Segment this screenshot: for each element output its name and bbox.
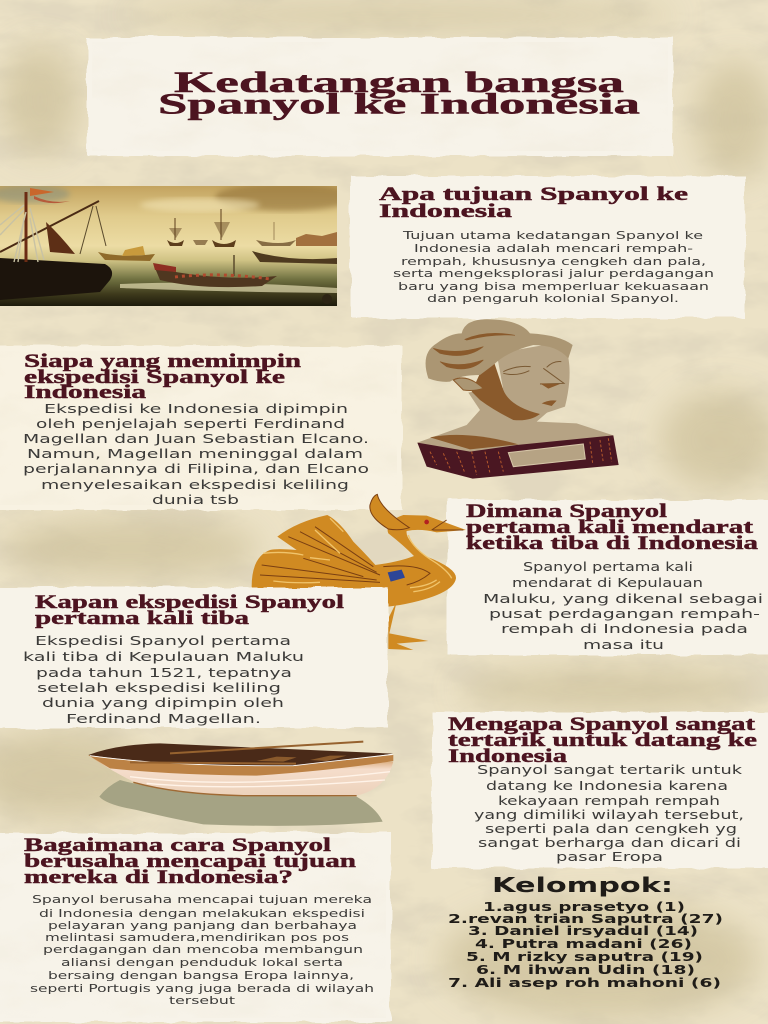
panel background (350, 176, 745, 318)
body text (23, 633, 304, 726)
boat shadow (99, 780, 383, 826)
heading: ekspedisi Spanyol ke (24, 367, 285, 388)
icon: classical bust (417, 319, 619, 479)
member list: 7. Ali asep roh mahoni (6) (448, 975, 721, 990)
group members (448, 873, 723, 990)
body text: Namun, Magellan meninggal dalam (27, 446, 363, 461)
member list: 2.revan trian Saputra (27) (448, 911, 723, 926)
title card (87, 37, 673, 156)
body text: melintasi samudera,mendirikan pos pos (45, 932, 349, 944)
heading: Bagaimana cara Spanyol (24, 835, 331, 856)
group heading: Kelompok: (492, 873, 673, 897)
body text: menyelesaikan ekspedisi keliling (41, 477, 349, 492)
body text: Ferdinand Magellan. (66, 711, 261, 726)
body text (30, 894, 374, 1007)
boat hull (88, 755, 393, 796)
body text: tersebut (169, 995, 235, 1007)
body text: Ekspedisi Spanyol pertama (35, 633, 291, 648)
panel: siapa yang memimpin (0, 346, 402, 510)
body text: dan pengaruh kolonial Spanyol. (427, 292, 679, 305)
body text: Maluku, yang dikenal sebagai (483, 591, 763, 606)
body text: dunia tsb (152, 492, 239, 507)
body text: masa itu (583, 637, 664, 652)
body text: datang ke Indonesia karena (486, 779, 728, 793)
heading: mereka di Indonesia? (24, 867, 293, 888)
heading: Indonesia (379, 201, 513, 222)
panel: mengapa (432, 712, 768, 868)
panel background (0, 833, 391, 1022)
body text: setelah ekspedisi keliling (37, 680, 281, 695)
bird legs and feet (388, 602, 428, 650)
body text: rempah, khususnya cengkeh dan pala, (401, 255, 706, 268)
heading: Indonesia (24, 382, 147, 403)
heading: Dimana Spanyol (466, 501, 667, 522)
panel: tujuan (350, 176, 745, 318)
body text: yang dimiliki wilayah tersebut, (474, 808, 744, 822)
body text: seperti Portugis yang juga berada di wilayah (30, 983, 374, 995)
body text: pasar Eropa (556, 850, 663, 864)
heading (35, 592, 344, 629)
panel: title (87, 37, 673, 156)
body text: Spanyol berusaha mencapai tujuan mereka (32, 894, 372, 906)
body text: kali tiba di Kepulauan Maluku (23, 649, 304, 664)
body text (393, 229, 714, 305)
heading (448, 714, 757, 767)
image: painting of Spanish ships (0, 183, 355, 306)
member list: 3. Daniel irsyadul (14) (468, 923, 698, 938)
heading: pertama kali tiba (35, 608, 250, 629)
body text (23, 401, 369, 507)
body text: aliansi dengan penduduk lokal serta (61, 957, 343, 969)
heading (379, 184, 688, 222)
member list: 1.agus prasetyo (1) (483, 899, 685, 914)
heading: berusaha mencapai tujuan (24, 851, 357, 872)
body text: perjalanannya di Filipina, dan Elcano (23, 461, 369, 476)
panel: dimana (447, 500, 768, 655)
member list: 6. M ihwan Udin (18) (476, 962, 695, 977)
heading (466, 501, 759, 554)
body text: di Indonesia dengan melakukan ekspedisi (39, 908, 365, 920)
face (497, 342, 570, 415)
panel background (0, 587, 388, 728)
body text: seperti pala dan cengkeh yg (485, 822, 737, 836)
panel background (432, 712, 768, 868)
plinth (417, 435, 619, 479)
body text (483, 559, 763, 652)
body text (474, 763, 744, 864)
panel background (447, 500, 768, 655)
heading (24, 835, 357, 888)
bird body and head (375, 515, 466, 607)
member list: 5. M rizky saputra (19) (466, 949, 703, 964)
title (158, 66, 640, 120)
member list: 4. Putra madani (26) (475, 936, 692, 951)
body text: pelayaran yang panjang dan berbahaya (48, 920, 357, 932)
boat interior (88, 743, 393, 766)
body text: baru yang bisa memperluar kekuasaan (398, 280, 709, 293)
body text: mendarat di Kepulauan (512, 575, 703, 590)
bird crest (370, 494, 409, 530)
heading: Apa tujuan Spanyol ke (379, 184, 688, 205)
heading: pertama kali mendarat (466, 517, 754, 538)
heading: Mengapa Spanyol sangat (448, 714, 756, 735)
heading: tertarik untuk datang ke (448, 730, 757, 751)
panel background (0, 346, 402, 510)
hair (426, 319, 573, 382)
body text: Ekspedisi ke Indonesia dipimpin (44, 401, 348, 416)
body text: Magellan dan Juan Sebastian Elcano. (23, 431, 369, 446)
panel: bagaimana (0, 833, 391, 1022)
body text: serta mengeksplorasi jalur perdagangan (393, 267, 714, 280)
body text: Spanyol sangat tertarik untuk (477, 763, 742, 777)
heading: Siapa yang memimpin (24, 351, 302, 372)
icon: golden bird (252, 494, 466, 650)
body text: bersaing dengan bangsa Eropa lainnya, (48, 970, 354, 982)
heading: Kapan ekspedisi Spanyol (35, 592, 344, 613)
body text: Indonesia adalah mencari rempah- (414, 242, 693, 255)
body text: rempah di Indonesia pada (501, 621, 748, 636)
member list (448, 899, 723, 990)
body text: oleh penjelajah seperti Ferdinand (36, 416, 345, 431)
heading: Indonesia (448, 746, 568, 767)
heading: ketika tiba di Indonesia (466, 533, 759, 554)
body text: perdagangan dan mencoba membangun (43, 944, 363, 956)
body text: pusat perdagangan rempah- (489, 606, 760, 621)
icon: wooden boat (88, 742, 393, 826)
body text: pada tahun 1521, tepatnya (36, 665, 292, 680)
title: Kedatangan bangsa (174, 66, 624, 99)
body text: Tujuan utama kedatangan Spanyol ke (402, 229, 703, 242)
body text: kekayaan rempah rempah (498, 794, 720, 808)
panel: kapan (0, 587, 388, 728)
body text: Spanyol pertama kali (523, 559, 693, 574)
body text: dunia yang dipimpin oleh (42, 695, 284, 710)
heading (24, 351, 302, 403)
bird tail fan (252, 515, 388, 592)
title: Spanyol ke Indonesia (158, 88, 640, 120)
body text: sangat berharga dan dicari di (478, 836, 741, 850)
